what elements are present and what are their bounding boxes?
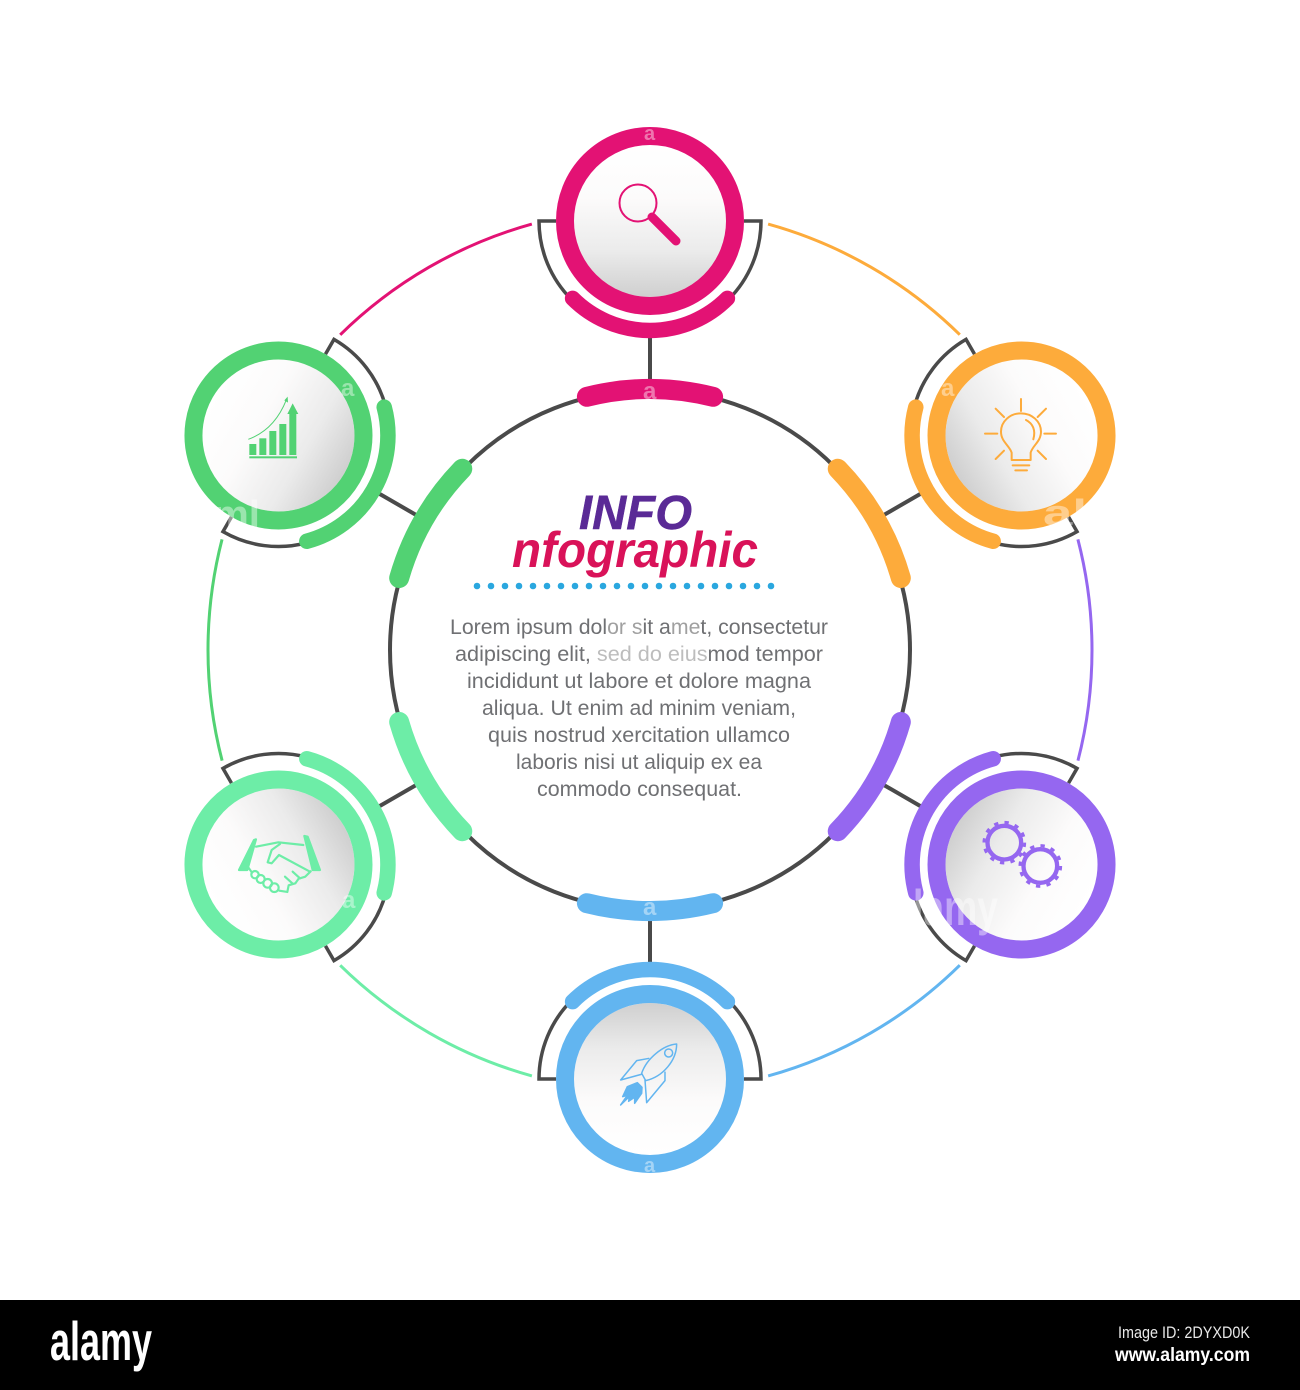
node: mint, lower left <box>149 680 486 1003</box>
watermark fragments: ml <box>213 494 260 536</box>
watermark fragments: a <box>941 375 955 402</box>
node: blue, bottom <box>539 903 761 1164</box>
title <box>512 487 758 578</box>
watermark fragments: a <box>342 887 356 914</box>
node: orange, upper right <box>814 297 1151 620</box>
icon: gears <box>984 822 1061 886</box>
body text <box>450 616 828 801</box>
body text: Lorem ipsum dolor sit amet, consectetur <box>450 616 828 639</box>
icon: magnifying glass <box>620 184 676 241</box>
footer band: www.alamy.com <box>1114 1345 1250 1366</box>
watermark fragments: a <box>643 894 657 921</box>
watermark fragments: al <box>1043 492 1087 533</box>
watermark fragments: lamy <box>913 880 998 936</box>
title: INFO <box>579 487 692 540</box>
watermark fragments: a <box>644 1155 656 1177</box>
body text: incididunt ut labore et dolore magna <box>467 670 811 693</box>
node: green, upper left <box>149 297 486 620</box>
body text: adipiscing elit, sed do eiusmod tempor <box>455 643 823 666</box>
title: nfographic <box>512 522 758 578</box>
outer arc: pink <box>340 169 532 390</box>
body text: quis nostrud xercitation ullamco <box>488 724 790 747</box>
outer arc: green <box>126 539 318 761</box>
body text: aliqua. Ut enim ad minim veniam, <box>482 697 796 720</box>
icon: rocket <box>621 1044 677 1105</box>
outer arc: purple <box>982 539 1174 761</box>
icon: growth chart <box>248 397 298 458</box>
body text: commodo consequat. <box>537 778 742 801</box>
central circle <box>390 390 910 910</box>
dotted divider <box>477 583 773 589</box>
footer band: Image ID: 2DYXD0K <box>1118 1323 1251 1342</box>
watermark fragments: a <box>341 375 355 402</box>
node: pink, top <box>539 136 761 397</box>
icon: handshake <box>239 836 320 892</box>
outer arc: blue <box>768 910 960 1131</box>
footer band: alamy <box>50 1310 152 1372</box>
body text: laboris nisi ut aliquip ex ea <box>516 751 762 774</box>
outer arc: mint <box>340 965 532 1076</box>
outer arc: orange <box>768 224 960 335</box>
node: purple, lower right <box>814 680 1151 1003</box>
watermark fragments: a <box>644 123 656 145</box>
watermark fragments: a <box>643 378 657 405</box>
watermark fragments <box>213 123 1087 1177</box>
icon: light bulb <box>985 399 1056 470</box>
footer band <box>0 1300 1300 1390</box>
